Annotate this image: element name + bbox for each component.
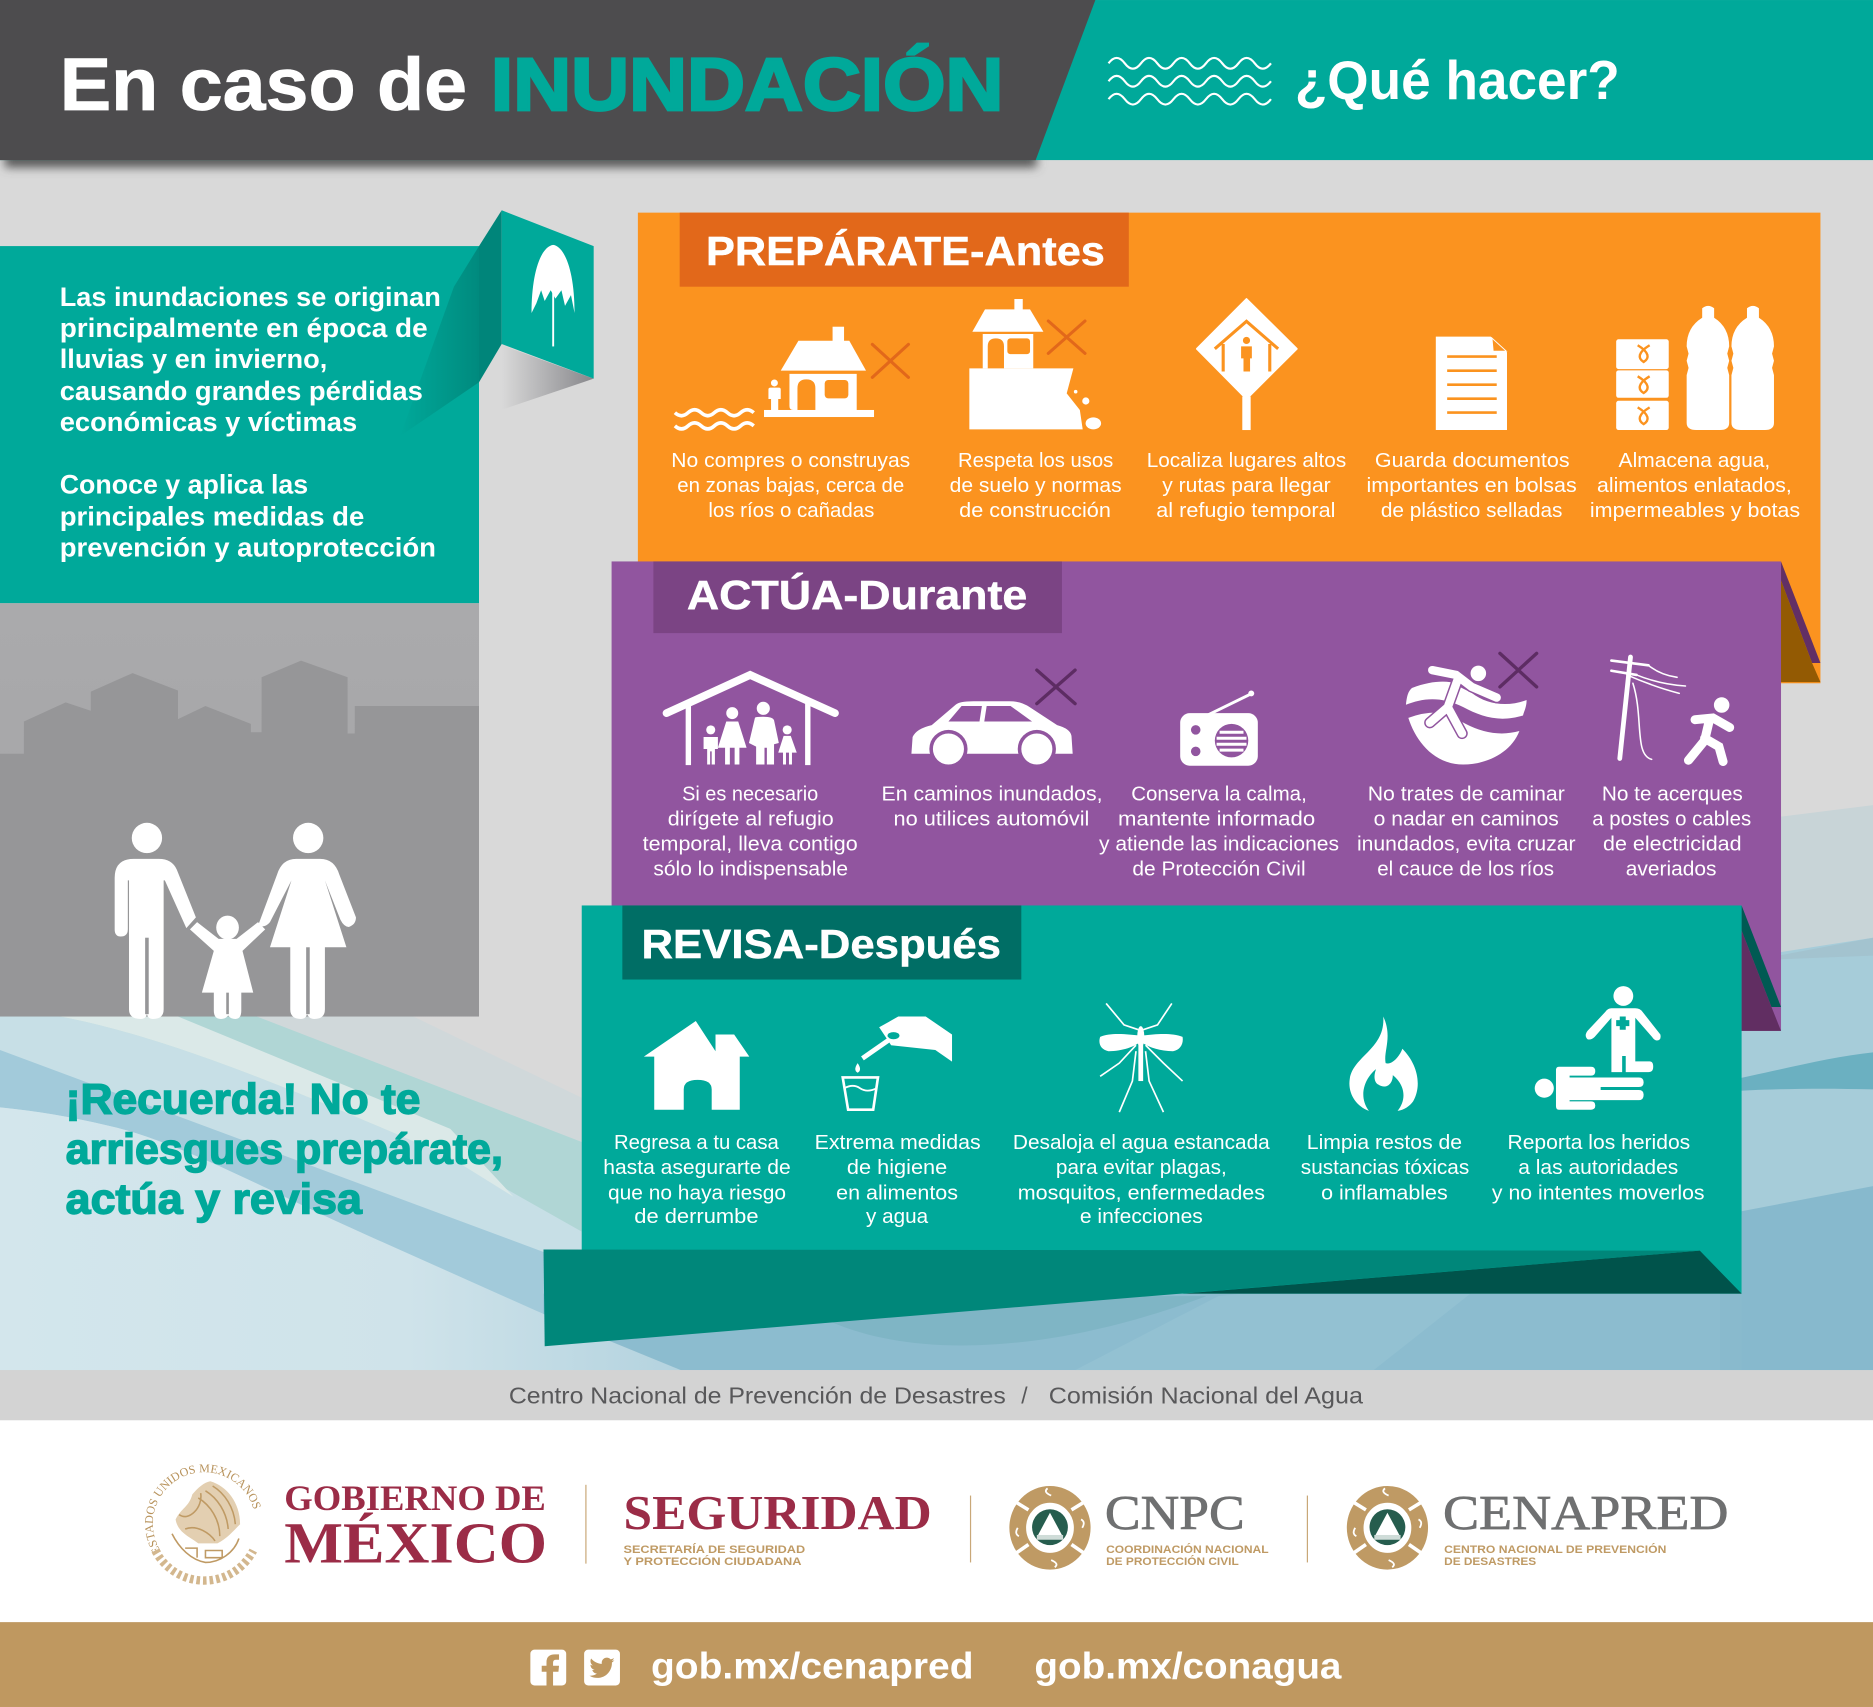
text: postes: a postes o cables: [1592, 808, 1751, 830]
text: no nadar: [1357, 783, 1576, 881]
intro text: [60, 282, 441, 563]
logo: cnpc emblem: [1013, 1488, 1087, 1567]
text: higiene: y agua: [866, 1206, 929, 1228]
icon: radio: [1180, 690, 1258, 766]
icon: car: [911, 670, 1075, 768]
logo: seguridad: SEGURIDAD: [624, 1485, 932, 1540]
text: documentos: de plástico selladas: [1381, 500, 1562, 522]
callout: remember: ¡Recuerda! No te: [66, 1075, 420, 1123]
text: no nadar: o nadar en caminos: [1374, 808, 1559, 830]
icon: twitter: [584, 1650, 620, 1685]
text: calma: mantente informado: [1118, 808, 1315, 830]
text: no nadar: inundados, evita cruzar: [1357, 834, 1576, 856]
icon: house near water: [675, 327, 908, 429]
subtitle: ¿Qué hacer?: [1295, 49, 1620, 111]
text: agua estancada: e infecciones: [1080, 1206, 1203, 1228]
text: no construyas: en zonas bajas, cerca de: [677, 475, 904, 497]
text: refugio: y rutas para llegar: [1162, 475, 1331, 497]
heading: prepárate: PREPÁRATE-Antes: [706, 228, 1105, 274]
text: usos de suelo: de suelo y normas: [950, 475, 1122, 497]
text: reporta: [1492, 1132, 1705, 1204]
text: refugio: Si es necesario: [682, 783, 818, 805]
icon: house on cliff: [969, 299, 1101, 429]
text: refugio: dirígete al refugio: [668, 808, 834, 830]
text: reporta: a las autoridades: [1518, 1157, 1678, 1179]
text: almacena: impermeables y botas: [1590, 500, 1800, 522]
panel fold: purple corner: [1742, 905, 1781, 1031]
logo: cenapred wordmark: CENTRO NACIONAL DE PREVENCIÓN: [1444, 1543, 1666, 1556]
source strip: /: [1021, 1383, 1028, 1409]
text: almacena: Almacena agua,: [1619, 450, 1770, 472]
panel: review after: [544, 905, 1742, 1346]
logo: gobierno de méxico: MÉXICO: [284, 1510, 547, 1575]
title: INUNDACIÓN: [491, 43, 1003, 126]
icon: family: [115, 823, 356, 1019]
intro text: Conoce y aplica las: [60, 469, 308, 499]
text: no nadar: No trates de caminar: [1368, 783, 1565, 805]
icon: shelter sign: [1197, 299, 1297, 430]
logo: seguridad: SECRETARÍA DE SEGURIDAD: [624, 1543, 805, 1556]
text: usos de suelo: Respeta los usos: [958, 450, 1113, 472]
text: no construyas: los ríos o cañadas: [708, 500, 874, 522]
panel: family illustration: [0, 603, 479, 1019]
footer bar: [0, 1622, 1873, 1707]
icon: swimmer in current: [1406, 653, 1537, 765]
icon: water waves: [1109, 58, 1271, 105]
logo: cenapred wordmark: CENAPRED: [1443, 1485, 1728, 1540]
callout: remember: actúa y revisa: [66, 1176, 363, 1224]
background waves: [0, 805, 1873, 1370]
title: En caso de: [60, 43, 467, 126]
text: calma: [1099, 783, 1339, 881]
logo: cnpc wordmark: COORDINACIÓN NACIONAL: [1106, 1543, 1269, 1556]
icon: facebook: [530, 1650, 566, 1685]
text: no construyas: No compres o construyas: [671, 450, 910, 472]
heading: prepárate: [680, 213, 1129, 287]
text: usos de suelo: de construcción: [959, 500, 1111, 522]
source strip: Centro Nacional de Prevención de Desastres: [509, 1383, 1006, 1409]
text: no construyas: [671, 450, 910, 522]
text: refugio: Localiza lugares altos: [1147, 450, 1346, 472]
heading: actúa: [653, 561, 1062, 633]
panel: prepare before: [638, 213, 1820, 683]
logo: cnpc wordmark: DE PROTECCIÓN CIVIL: [1106, 1555, 1239, 1568]
text: regresa: Regresa a tu casa: [614, 1132, 780, 1154]
text: reporta: Reporta los heridos: [1507, 1132, 1690, 1154]
intro text: principales medidas de: [60, 502, 364, 532]
intro text: prevención y autoprotección: [60, 533, 436, 563]
text: refugio: [1147, 450, 1346, 522]
icon: first aid: [1535, 986, 1661, 1110]
logo: seguridad: Y PROTECCIÓN CIUDADANA: [624, 1555, 802, 1568]
text: automóvil: En caminos inundados,: [882, 783, 1103, 805]
links: gob.mx/conagua: [1034, 1644, 1342, 1686]
logo: seguridad: [624, 1485, 932, 1568]
links: gob.mx/cenapred: [651, 1644, 974, 1686]
logo: national seal: ESTADOS UNIDOS MEXICANOS: [145, 1464, 261, 1556]
icon: flame: [1349, 1017, 1418, 1111]
icon: food and water: [1616, 306, 1774, 430]
text: regresa: que no haya riesgo: [608, 1182, 786, 1204]
icon: family in shelter: [667, 675, 835, 765]
logo: cnpc wordmark: [1105, 1485, 1269, 1568]
logo: gobierno de méxico: GOBIERNO DE: [284, 1478, 546, 1518]
heading: revisa: [622, 905, 1021, 980]
logo: cnpc wordmark: CNPC: [1105, 1485, 1245, 1540]
icon: fallen power lines and runner: [1611, 657, 1730, 762]
text: calma: de Protección Civil: [1132, 859, 1306, 881]
text: limpia: sustancias tóxicas: [1301, 1157, 1469, 1179]
callout: remember: [66, 1075, 503, 1224]
text: refugio: sólo lo indispensable: [653, 859, 848, 881]
callout: remember: arriesgues prepárate,: [66, 1125, 503, 1173]
text: automóvil: [882, 783, 1103, 830]
icon: dropper and glass: [843, 1017, 952, 1110]
icon: house: [644, 1021, 749, 1110]
logo band: [0, 1420, 1873, 1622]
logo: cenapred wordmark: DE DESASTRES: [1444, 1556, 1537, 1568]
source strip: [0, 1370, 1873, 1420]
text: regresa: hasta asegurarte de: [603, 1157, 791, 1179]
text: postes: [1592, 783, 1751, 881]
ribbon: [544, 1249, 1742, 1346]
header: dark title band: [0, 0, 1873, 167]
text: regresa: de derrumbe: [634, 1206, 759, 1228]
intro text: económicas y víctimas: [60, 407, 357, 437]
text: agua estancada: Desaloja el agua estancada: [1013, 1132, 1270, 1154]
text: postes: averiados: [1626, 859, 1717, 881]
text: higiene: [815, 1132, 981, 1228]
source strip: Comisión Nacional del Agua: [1049, 1383, 1363, 1409]
text: higiene: en alimentos: [836, 1182, 958, 1204]
icon: mosquito: [1099, 1003, 1183, 1112]
panel fold: orange corner: [1781, 561, 1820, 682]
text: limpia: o inflamables: [1321, 1182, 1448, 1204]
text: documentos: importantes en bolsas: [1367, 475, 1577, 497]
logo: cenapred emblem: [1350, 1488, 1424, 1567]
title: [60, 43, 1003, 126]
text: agua estancada: [1013, 1132, 1270, 1228]
text: limpia: [1301, 1132, 1469, 1204]
links: [651, 1644, 1342, 1686]
heading: revisa: REVISA-Después: [641, 921, 1001, 967]
logo: gobierno de méxico: [284, 1478, 547, 1575]
text: refugio: temporal, lleva contigo: [643, 834, 858, 856]
text: calma: y atiende las indicaciones: [1099, 834, 1339, 856]
text: automóvil: no utilices automóvil: [893, 808, 1089, 830]
text: almacena: alimentos enlatados,: [1597, 475, 1792, 497]
panel: act during: [612, 561, 1781, 1031]
text: refugio: al refugio temporal: [1156, 500, 1335, 522]
logo: cenapred wordmark: [1443, 1485, 1728, 1568]
text: postes: No te acerques: [1602, 783, 1743, 805]
panel: introduction: [0, 246, 479, 603]
intro text: causando grandes pérdidas: [60, 376, 423, 406]
text: higiene: de higiene: [847, 1157, 947, 1179]
icon: document: [1436, 337, 1507, 430]
text: documentos: Guarda documentos: [1375, 450, 1570, 472]
text: reporta: y no intentes moverlos: [1492, 1182, 1705, 1204]
icon: umbrella flag: [479, 210, 594, 410]
text: calma: Conserva la calma,: [1131, 783, 1307, 805]
city skyline: [0, 661, 479, 1017]
text: higiene: Extrema medidas: [815, 1132, 981, 1154]
text: almacena: [1590, 450, 1800, 522]
text: no nadar: el cauce de los ríos: [1377, 859, 1554, 881]
text: agua estancada: mosquitos, enfermedades: [1018, 1182, 1265, 1204]
text: agua estancada: para evitar plagas,: [1056, 1157, 1227, 1179]
text: refugio: [643, 783, 858, 881]
intro text: Las inundaciones se originan: [60, 282, 441, 312]
text: postes: de electricidad: [1603, 834, 1742, 856]
text: limpia: Limpia restos de: [1307, 1132, 1462, 1154]
heading: actúa: ACTÚA-Durante: [687, 572, 1027, 618]
text: regresa: [603, 1132, 791, 1228]
text: usos de suelo: [950, 450, 1122, 522]
text: documentos: [1367, 450, 1577, 522]
intro text: principalmente en época de: [60, 313, 428, 343]
intro text: lluvias y en invierno,: [60, 344, 327, 374]
